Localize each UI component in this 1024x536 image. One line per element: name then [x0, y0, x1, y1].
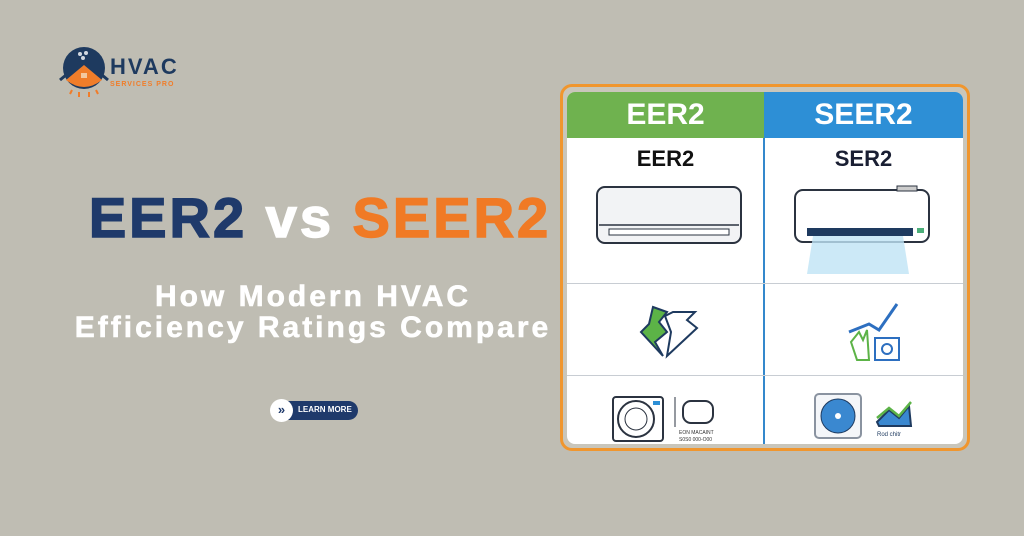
- icon: indoor AC with airflow: [794, 186, 930, 274]
- icon: green arrow: [640, 306, 698, 359]
- logo text: HVAC: [110, 54, 179, 79]
- button: learn more: LEARN MORE: [298, 405, 352, 414]
- header: EER2: [567, 92, 764, 138]
- icon: blue outdoor unit and chart: [814, 393, 912, 439]
- icon: indoor AC unit: [596, 186, 742, 244]
- icon: outdoor unit and tank: S0S0 000-O00: [679, 437, 712, 443]
- label: EER2: EER2: [637, 146, 694, 171]
- logo: SERVICES PRO: [110, 81, 174, 88]
- icon: chevrons: »: [278, 402, 285, 417]
- header: EER2: EER2: [626, 98, 705, 131]
- panel: comparison card: [560, 84, 970, 451]
- icon: growth chart house: [848, 303, 900, 361]
- header: SEER2: SEER2: [814, 98, 913, 131]
- subtitle: Efficiency Ratings Compare: [75, 311, 551, 344]
- icon: house logo: [59, 47, 109, 97]
- label: SER2: SER2: [835, 146, 892, 171]
- title: EER2 vs SEER2: [89, 186, 551, 249]
- logo: [59, 47, 179, 97]
- button: learn more: [270, 399, 358, 422]
- icon: blue outdoor unit and chart: Rod chitr: [877, 432, 901, 438]
- header: SEER2: [764, 92, 963, 138]
- subtitle: [75, 280, 551, 344]
- icon: chevrons: [270, 399, 293, 422]
- icon: outdoor unit and tank: [612, 396, 714, 443]
- icon: outdoor unit and tank: EON MACAINT: [679, 430, 714, 436]
- subtitle: How Modern HVAC: [155, 280, 471, 313]
